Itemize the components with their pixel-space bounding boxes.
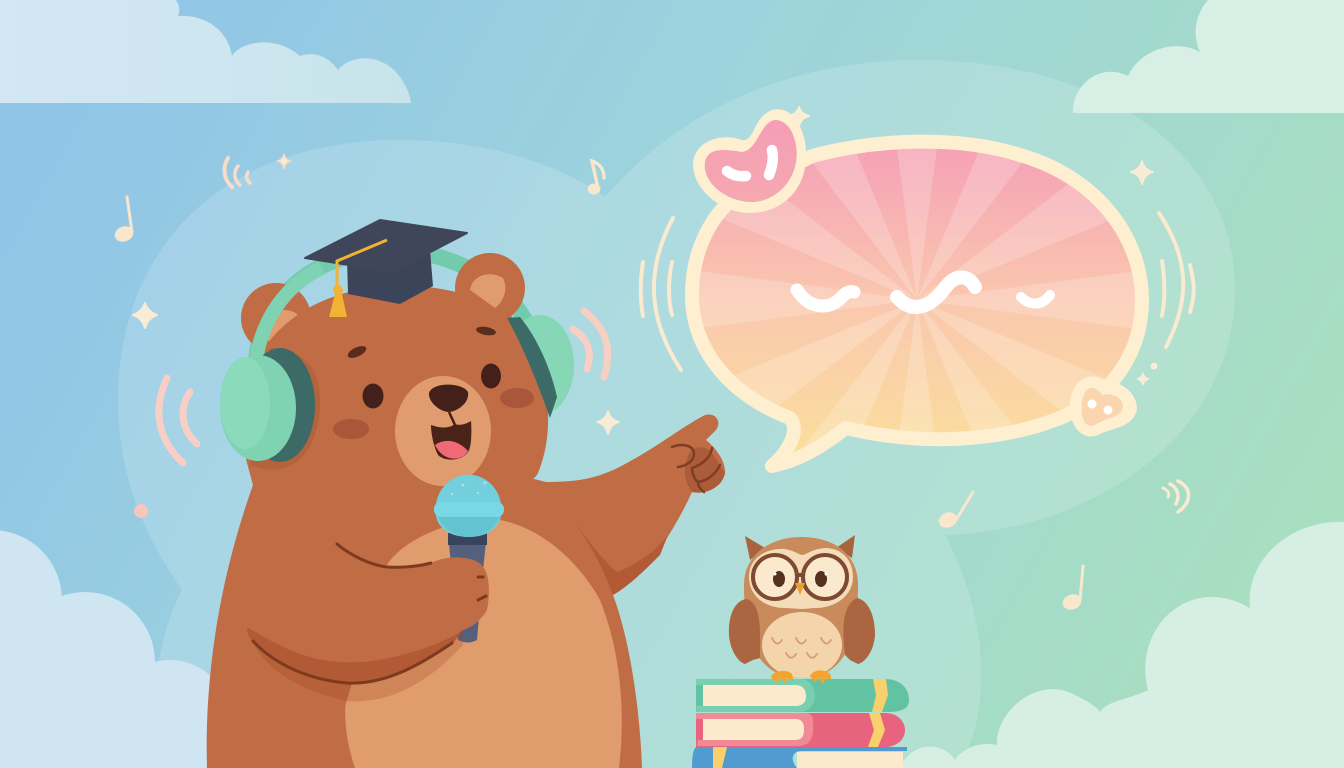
head <box>242 285 548 507</box>
underarm wedge shading <box>567 513 668 595</box>
owl wings <box>729 598 875 664</box>
owl beak <box>795 583 805 595</box>
cloud: bottom left <box>0 530 230 768</box>
near ear inner <box>470 274 505 308</box>
left earcup <box>220 348 320 470</box>
far ear <box>241 283 311 353</box>
owl ears <box>745 535 855 560</box>
bubble outline <box>692 142 1142 466</box>
sunburst rays <box>699 148 1135 448</box>
body <box>207 414 725 768</box>
sound waves: around bear <box>159 158 608 463</box>
arm crease lines <box>253 544 486 683</box>
bear <box>207 220 725 768</box>
arm underside band <box>247 628 463 683</box>
muzzle <box>395 376 491 486</box>
near arm and hand <box>240 540 489 662</box>
pink book <box>696 713 905 747</box>
cloud: top left <box>0 0 411 103</box>
cloud: top right <box>1073 0 1344 113</box>
cloud: bottom right <box>900 522 1344 768</box>
speech bubble <box>685 109 1149 473</box>
sparkles and dots <box>133 107 1158 518</box>
owl feet <box>771 670 831 684</box>
owl feather marks <box>772 638 831 658</box>
peach blob badge <box>1070 377 1137 437</box>
owl <box>729 535 875 684</box>
owl face <box>749 548 853 609</box>
arm drop shadow <box>248 628 463 701</box>
sound waves: around speech bubble <box>641 213 1194 512</box>
tassel <box>329 240 387 317</box>
blue book <box>692 747 907 768</box>
graduation cap <box>305 220 467 317</box>
pointing hand <box>672 445 725 493</box>
eyebrows <box>346 325 497 360</box>
headphone band <box>256 250 525 360</box>
mouth <box>431 421 471 460</box>
green book <box>696 679 909 712</box>
mouth line <box>449 412 455 425</box>
owl glasses <box>753 555 847 599</box>
owl eyes <box>773 571 828 587</box>
owl body <box>744 537 858 678</box>
far ear headphone band overlay <box>256 268 322 360</box>
music notes <box>113 161 1083 612</box>
owl belly <box>762 612 842 678</box>
bubble fill <box>692 142 1142 466</box>
pink bean badge <box>693 109 806 213</box>
near ear <box>455 253 525 323</box>
belly <box>345 518 622 768</box>
nose <box>429 385 468 412</box>
microphone <box>434 475 504 642</box>
cheeks <box>333 388 534 439</box>
eyes <box>362 364 501 408</box>
books stack <box>692 679 909 768</box>
white squiggles <box>797 277 1050 307</box>
halo glow behind characters <box>118 60 1235 768</box>
right earcup <box>506 315 574 415</box>
tongue <box>435 441 468 459</box>
right earcup pad <box>507 317 557 418</box>
